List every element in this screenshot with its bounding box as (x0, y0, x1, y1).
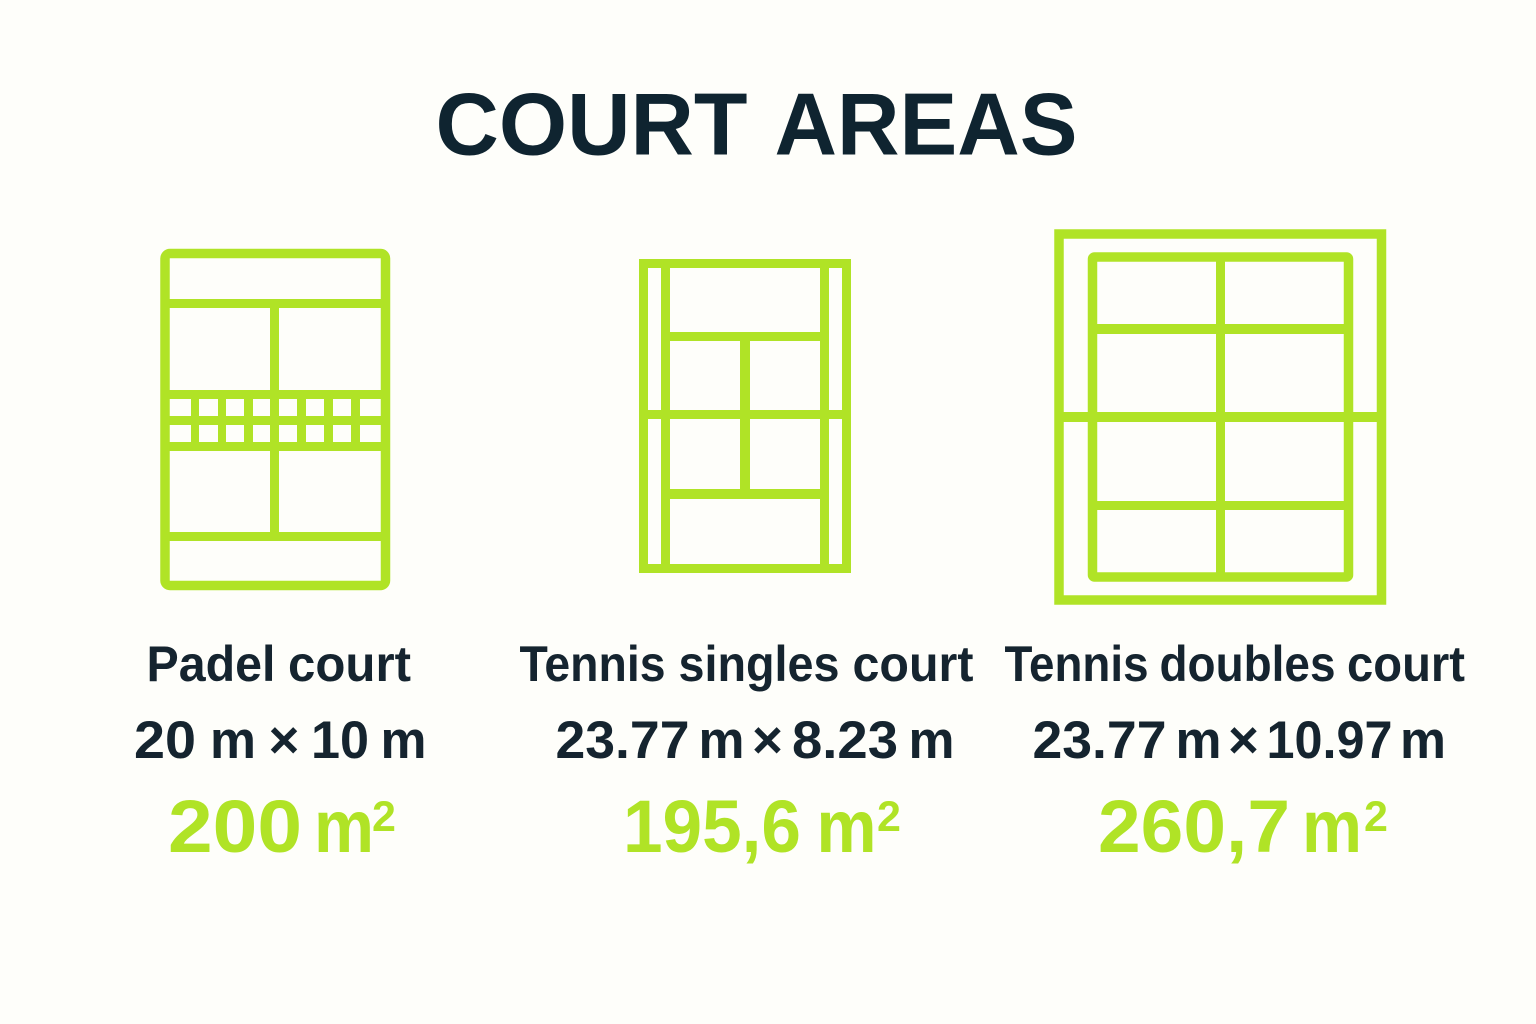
dimensions: padel: × (269, 711, 299, 770)
area: padel: 2 (372, 793, 396, 841)
area: padel: m (314, 785, 374, 868)
dimensions: tennis doubles: 10.97 (1266, 711, 1392, 770)
dimensions: tennis singles: 23.77 (556, 711, 690, 770)
area: tennis doubles: 2 (1364, 793, 1388, 841)
dimensions: padel (134, 711, 426, 770)
area: padel: 200 (168, 785, 302, 868)
panel: tennis singles label (520, 636, 974, 868)
dimensions: tennis singles: 8.23 (792, 711, 898, 770)
dimensions: tennis doubles: m (1400, 711, 1446, 770)
court name: tennis doubles: court (1347, 636, 1465, 692)
area: tennis doubles (1098, 785, 1388, 868)
area: tennis singles (623, 785, 901, 868)
area: tennis doubles: m (1302, 785, 1362, 868)
area: padel (168, 785, 396, 868)
court name: padel: court (288, 636, 411, 692)
dimensions: tennis doubles: × (1228, 711, 1259, 770)
court name: tennis singles: singles (678, 636, 840, 692)
area: tennis singles: 195,6 (623, 785, 801, 868)
dimensions: tennis doubles: m (1176, 711, 1222, 770)
icon: padel court (165, 254, 386, 586)
icon: tennis singles court (644, 264, 846, 568)
dimensions: padel: m (210, 711, 256, 770)
dimensions: padel: 10 (311, 711, 369, 770)
title: AREAS (774, 74, 1078, 174)
dimensions: tennis doubles: 23.77 (1032, 711, 1166, 770)
panel: tennis doubles label (1004, 636, 1465, 868)
court name: tennis doubles: doubles (1160, 636, 1336, 692)
panel: padel court label (134, 636, 426, 868)
court name: padel (146, 636, 411, 692)
dimensions: tennis doubles (1032, 711, 1446, 770)
dimensions: tennis singles: × (752, 711, 783, 770)
court name: tennis doubles (1004, 636, 1465, 692)
court name: tennis singles: Tennis (520, 636, 666, 692)
area: tennis singles: m (816, 785, 876, 868)
dimensions: padel: m (380, 711, 426, 770)
dimensions: padel: 20 (134, 711, 196, 770)
court name: padel: Padel (146, 636, 276, 692)
dimensions: tennis singles: m (908, 711, 954, 770)
court name: tennis singles: court (852, 636, 974, 692)
area: tennis singles: 2 (877, 793, 901, 841)
title: COURT (436, 74, 748, 174)
area: tennis doubles: 260,7 (1098, 785, 1290, 868)
court name: tennis doubles: Tennis (1004, 636, 1148, 692)
dimensions: tennis singles: m (698, 711, 744, 770)
court name: tennis singles (520, 636, 974, 692)
icon: tennis doubles court (1059, 234, 1382, 600)
dimensions: tennis singles (556, 711, 954, 770)
title (436, 74, 1078, 174)
